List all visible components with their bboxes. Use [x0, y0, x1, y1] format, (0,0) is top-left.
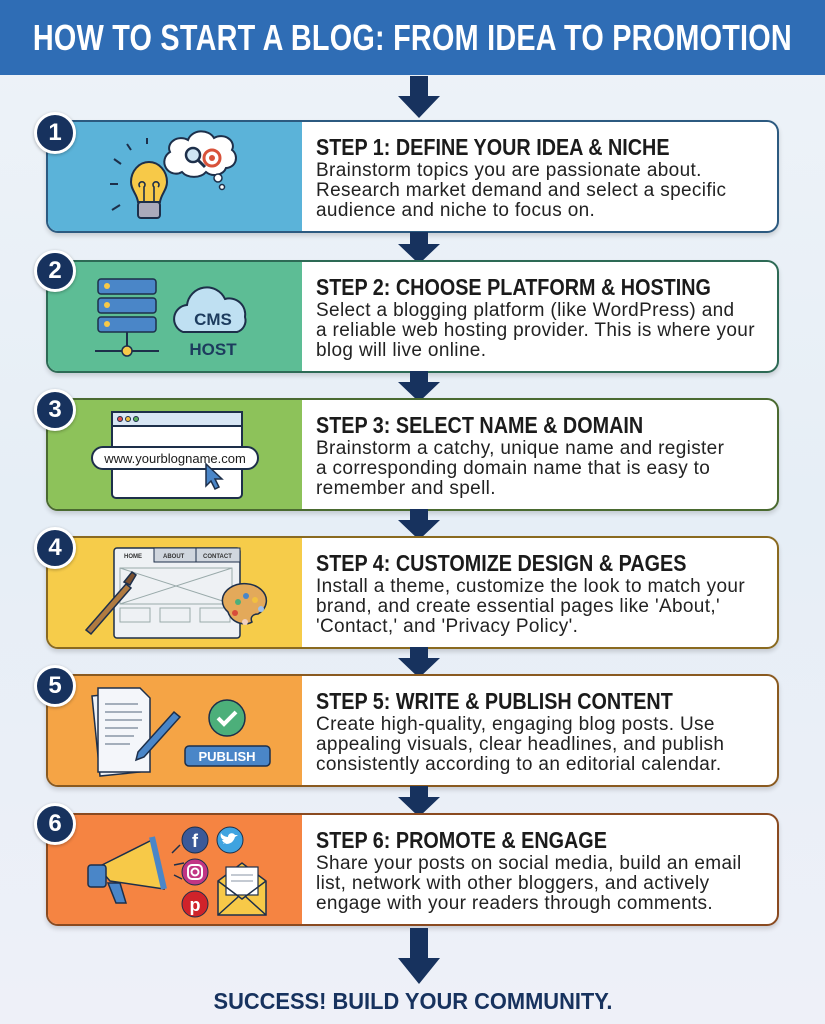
arrow: final — [398, 928, 440, 984]
icon: browser with domain — [48, 400, 302, 509]
text: step 1: Brainstorm topics you are passionate about. — [316, 160, 702, 181]
icon: megaphone, social, email — [48, 815, 302, 924]
text: step 5: consistently according to an editorial calendar. — [316, 754, 721, 775]
text: step 5 — [316, 688, 724, 775]
text: step 4 — [316, 550, 745, 637]
text: step 3 — [316, 412, 724, 499]
text: step 3: Brainstorm a catchy, unique name and register — [316, 438, 724, 459]
number: 6 — [34, 803, 76, 845]
arrow: 5 to 6 — [398, 786, 440, 813]
text: step 4: brand, and create essential pages like 'About,' — [316, 596, 720, 617]
text: step 5: appealing visuals, clear headlines, and publish — [316, 734, 724, 755]
text: step 4: Install a theme, customize the look to match your — [316, 576, 745, 597]
panel: step 1 — [46, 120, 779, 233]
panel: step 4 — [46, 536, 779, 649]
number: 5: 5 — [48, 672, 62, 699]
arrow: 1 to 2 — [398, 232, 440, 260]
arrow: 2 to 3 — [398, 371, 440, 398]
text: step 3: STEP 3: SELECT NAME & DOMAIN — [316, 412, 643, 438]
text: step 2: a reliable web hosting provider. This is where your — [316, 320, 755, 341]
text: step 1: STEP 1: DEFINE YOUR IDEA & NICHE — [316, 134, 670, 160]
panel: step 5 — [46, 674, 779, 787]
icon: wireframe, brush and palette: HOME — [124, 554, 142, 560]
panel: step 6 — [46, 813, 779, 926]
panel: step 3 — [46, 398, 779, 511]
text: step 4: STEP 4: CUSTOMIZE DESIGN & PAGES — [316, 550, 686, 576]
text: step 5: STEP 5: WRITE & PUBLISH CONTENT — [316, 688, 673, 714]
text: step 5: Create high-quality, engaging blog posts. Use — [316, 714, 715, 735]
text: step 3: remember and spell. — [316, 478, 496, 499]
text: step 2: Select a blogging platform (like WordPress) and — [316, 300, 734, 321]
text: step 3: a corresponding domain name that is easy to — [316, 458, 710, 479]
text: step 1: audience and niche to focus on. — [316, 200, 595, 221]
number: 4: 4 — [48, 534, 62, 561]
icon: wireframe, brush and palette — [48, 538, 302, 647]
text: step 2 — [316, 274, 755, 361]
number: 2: 2 — [48, 257, 62, 284]
title — [0, 0, 825, 75]
text: step 6 — [316, 827, 742, 914]
icon: megaphone, social, email: p — [190, 895, 200, 915]
number: 1 — [34, 112, 76, 154]
text: step 2: blog will live online. — [316, 340, 486, 361]
number: 1: 1 — [48, 119, 62, 146]
footer text: SUCCESS! BUILD YOUR COMMUNITY. — [213, 988, 612, 1014]
icon: wireframe, brush and palette: CONTACT — [203, 554, 232, 560]
panel: step 2 — [46, 260, 779, 373]
icon: megaphone, social, email: f — [192, 831, 199, 851]
text: step 6: Share your posts on social media, build an email — [316, 853, 742, 874]
icon: browser with domain: www.yourblogname.com — [103, 451, 246, 466]
text: step 4: 'Contact,' and 'Privacy Policy'. — [316, 616, 578, 637]
number: 4 — [34, 527, 76, 569]
number: 3: 3 — [48, 396, 62, 423]
icon: server and cloud: HOST — [189, 340, 237, 359]
icon: wireframe, brush and palette: ABOUT — [163, 554, 185, 560]
title: HOW TO START A BLOG: FROM IDEA TO PROMOTION — [33, 16, 792, 58]
text: step 2: STEP 2: CHOOSE PLATFORM & HOSTING — [316, 274, 711, 300]
number: 3 — [34, 389, 76, 431]
arrow: 4 to 5 — [398, 647, 440, 674]
number: 2 — [34, 250, 76, 292]
icon: document, pen, publish — [48, 676, 302, 785]
text: step 6: STEP 6: PROMOTE & ENGAGE — [316, 827, 607, 853]
number: 5 — [34, 665, 76, 707]
icon: server and cloud — [48, 262, 302, 371]
icon: light bulb idea — [48, 122, 302, 231]
arrow: top — [398, 76, 440, 118]
arrow: 3 to 4 — [398, 509, 440, 536]
text: step 1 — [316, 134, 726, 221]
text: step 6: engage with your readers through comments. — [316, 893, 713, 914]
text: step 6: list, network with other bloggers, and actively — [316, 873, 709, 894]
number: 6: 6 — [48, 810, 62, 837]
icon: server and cloud: CMS — [194, 310, 232, 329]
text: step 1: Research market demand and select a specific — [316, 180, 726, 201]
icon: document, pen, publish: PUBLISH — [198, 749, 256, 764]
